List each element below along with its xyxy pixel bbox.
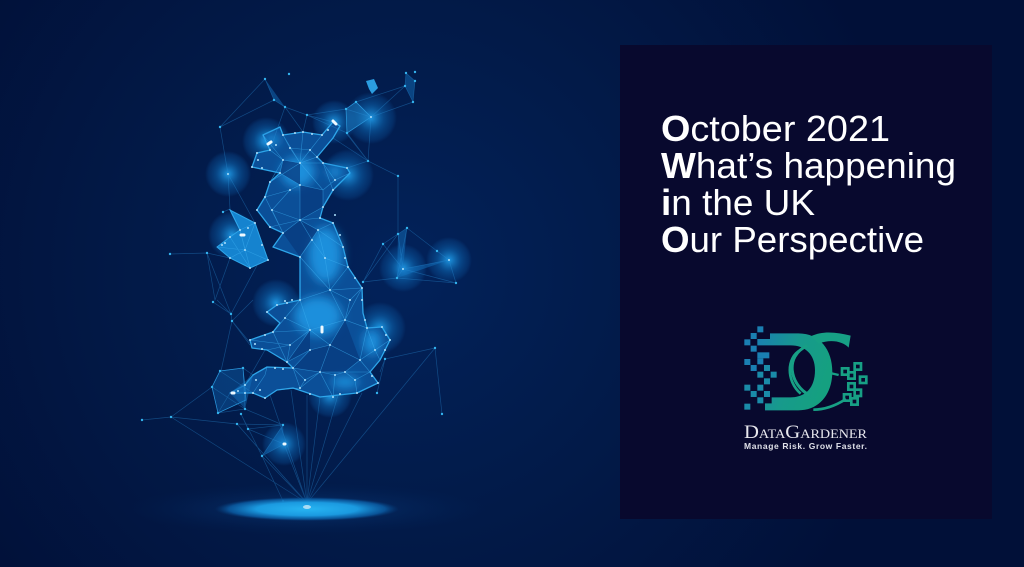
logo wordmark: DATAGARDENER <box>744 422 867 443</box>
logo C arcs <box>792 346 809 395</box>
title <box>661 108 956 260</box>
title: October 2021 <box>661 108 890 149</box>
logo right knots <box>842 363 866 405</box>
DataGardener logo <box>744 326 867 451</box>
title: Our Perspective <box>661 219 924 260</box>
UK network map illustration <box>127 72 487 535</box>
logo mark <box>744 326 866 410</box>
bright nodes <box>222 117 449 503</box>
map: Great Britain landmass <box>230 122 390 398</box>
map: Orkney cluster <box>346 102 371 133</box>
network nodes <box>142 72 456 501</box>
mesh inside map <box>217 132 390 397</box>
title: in the UK <box>661 182 815 223</box>
map: Shetland <box>366 79 378 94</box>
logo pixels <box>744 326 777 410</box>
right panel <box>620 45 992 519</box>
glow halos <box>205 92 472 466</box>
map: inner bright areas <box>264 134 381 388</box>
brightest clusters <box>232 121 336 444</box>
beam base glow <box>127 483 487 535</box>
map: darker facets <box>280 160 360 372</box>
logo tagline: Manage Risk. Grow Faster. <box>744 441 867 451</box>
map: Channel-side cluster <box>212 368 246 413</box>
logo D <box>757 333 832 410</box>
network facets <box>230 73 449 456</box>
map: Northern Ireland <box>217 210 268 268</box>
title: What’s happening <box>661 145 956 186</box>
network lines <box>142 73 456 503</box>
